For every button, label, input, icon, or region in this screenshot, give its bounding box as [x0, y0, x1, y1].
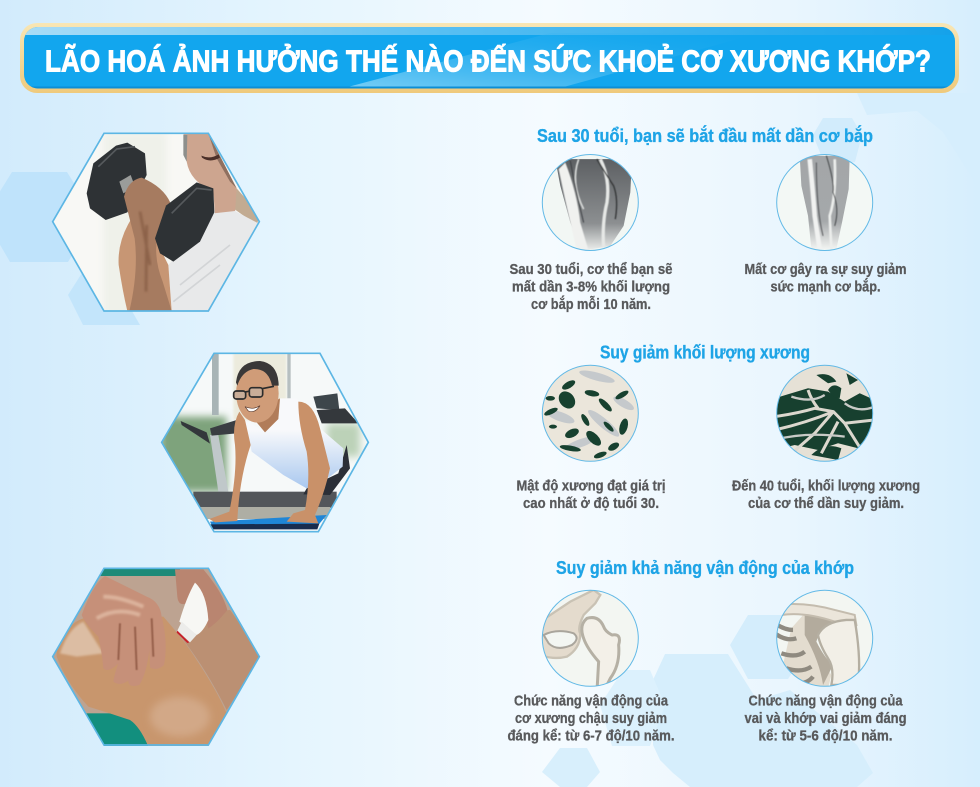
text: shoulder mobility: kể: từ 5-6 độ/10 năm.	[758, 728, 892, 744]
heading: joint mobility loss: Suy giảm khả năng vận động của khớp	[556, 558, 854, 578]
text: peak bone density	[516, 478, 666, 512]
illustration: hip joint	[540, 588, 640, 692]
text: muscle loss per decade: Sau 30 tuổi, cơ thể bạn sẽ	[510, 261, 672, 278]
text: bone mass decline at 40: của cơ thể dần suy giảm.	[748, 495, 904, 512]
text: shoulder mobility	[744, 692, 906, 744]
photo: older man doing push-ups	[160, 352, 370, 532]
title banner	[20, 23, 959, 93]
text: muscle loss per decade: cơ bắp mỗi 10 năm.	[531, 295, 651, 313]
hexagon frame	[53, 133, 259, 311]
section: muscle loss	[510, 125, 906, 313]
illustration: healthy muscle fibres	[540, 153, 640, 252]
text: muscle strength decline	[744, 261, 906, 296]
text: shoulder mobility: vai và khớp vai giảm đáng	[744, 710, 906, 727]
text: hip mobility: Chức năng vận động của	[514, 692, 669, 710]
text: hip mobility	[508, 692, 674, 744]
heading: muscle loss: Sau 30 tuổi, bạn sẽ bắt đầu mất dần cơ bắp	[537, 125, 873, 146]
section: joint mobility loss	[508, 558, 906, 744]
text: muscle strength decline: sức mạnh cơ bắp.	[770, 278, 880, 296]
text: hip mobility: đáng kể: từ 6-7 độ/10 năm.	[508, 728, 674, 744]
hexagon frame	[53, 568, 259, 745]
hexagon frame	[162, 353, 368, 532]
photo: hands on knee with bottle	[52, 568, 260, 746]
illustration: dense bone	[540, 363, 640, 463]
text: peak bone density: cao nhất ở độ tuổi 30.	[523, 495, 659, 512]
photo: man lifting dumbbell	[52, 132, 260, 312]
section: bone mass loss	[516, 342, 920, 512]
text: peak bone density: Mật độ xương đạt giá trị	[516, 478, 666, 494]
text: muscle loss per decade: mất dần 3-8% khối lượng	[512, 278, 670, 296]
text: hip mobility: cơ xương chậu suy giảm	[515, 710, 667, 727]
text: bone mass decline at 40	[732, 478, 920, 512]
text: shoulder mobility: Chức năng vận động của	[748, 692, 903, 710]
illustration: shoulder joint	[775, 588, 875, 688]
illustration: reduced muscle fibres	[775, 153, 875, 252]
text: muscle loss per decade	[510, 261, 672, 313]
text: bone mass decline at 40: Đến 40 tuổi, khối lượng xương	[732, 478, 920, 494]
heading: bone mass loss: Suy giảm khối lượng xương	[600, 342, 810, 362]
illustration: porous bone	[775, 363, 875, 463]
text: muscle strength decline: Mất cơ gây ra sự suy giảm	[744, 261, 906, 278]
